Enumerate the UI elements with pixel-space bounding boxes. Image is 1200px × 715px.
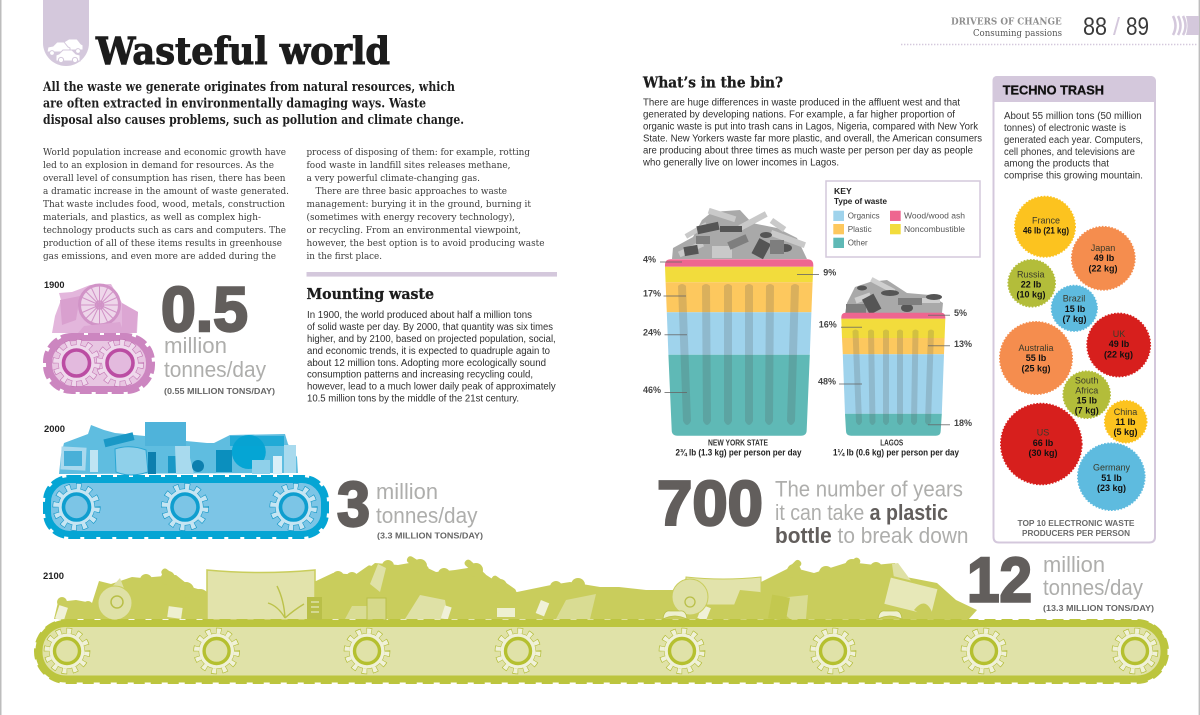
bubble: Russia: (10 kg) — [1016, 290, 1046, 300]
body text column 1: That waste includes food, wood, metals, construction — [43, 199, 285, 210]
body text column 2: food waste in landfill sites releases methane, — [306, 160, 510, 171]
bubble: France: 46 lb (21 kg) — [1023, 226, 1069, 236]
label: 1900: 1900 — [44, 280, 64, 290]
bubble: Japan: (22 kg) — [1088, 263, 1118, 273]
disc second — [672, 579, 708, 615]
body text column 1: overall level of consumption has risen, there has been — [43, 173, 286, 184]
label: 2000: 2000 — [44, 424, 65, 434]
paragraph: Mounting waste: consumption patterns and increasing recycling could, — [307, 370, 533, 381]
panel text: comprise this growing mountain. — [1004, 170, 1143, 182]
intro text: All the waste we generate originates from natural resources, which — [42, 80, 455, 95]
bubble: Japan: 49 lb — [1094, 253, 1115, 263]
chart labels: Lagos bin — [818, 308, 972, 458]
panel caption: PRODUCERS PER PERSON — [1022, 528, 1130, 538]
stat: 700 years: 700 — [657, 469, 763, 539]
stat: 3 million tonnes/day: 3 — [337, 470, 370, 540]
stat: 12 million tonnes/day — [967, 546, 1154, 616]
stat: 0.5 million tonnes/day — [161, 275, 275, 396]
bubble: US: 66 lb — [1033, 438, 1054, 448]
chart labels: Lagos bin: 13% — [954, 339, 972, 349]
page header: 88 — [1083, 13, 1107, 41]
chart labels: Lagos bin: LAGOS — [880, 439, 904, 448]
bubble: UK: UK — [1113, 329, 1125, 339]
paragraph: What's in the bin: organic waste is put into trash cans in Lagos, Nigeria, compared with New York — [643, 122, 978, 133]
icon: tab chevrons — [1173, 16, 1199, 35]
bubble: Brazil — [1052, 286, 1097, 331]
heading: Mounting waste: Mounting waste — [306, 286, 434, 303]
paragraph: What's in the bin: generated by developing nations. For example, a far higher proportion of — [643, 110, 955, 121]
key — [826, 181, 980, 257]
panel text — [1004, 111, 1143, 182]
paragraph: Mounting waste — [307, 310, 556, 404]
chart labels: Lagos bin: 1¼ lb (0.6 kg) per person per day — [833, 448, 959, 458]
body text column 1: World population increase and economic growth have — [43, 147, 286, 158]
page header: Consuming passions — [973, 28, 1062, 39]
chart: New York bin — [665, 259, 813, 436]
bubble: UK: 49 lb — [1109, 339, 1130, 349]
stat: 3 million tonnes/day: tonnes/day — [376, 503, 478, 528]
stat: 700 years: it can take a plastic — [775, 500, 948, 525]
label: 2100: 2100 — [43, 571, 64, 581]
stat: 700 years: bottle to break down — [775, 523, 968, 548]
chart labels: New York bin: 4% — [643, 254, 656, 264]
title: Wasteful world — [95, 29, 390, 73]
bubble: US: US — [1037, 428, 1049, 438]
paragraph: What's in the bin: are producing about three times as much waste per person per day as people — [643, 146, 973, 157]
bubble: Brazil: (7 kg) — [1062, 314, 1087, 324]
body text column 2: (sometimes with energy recovery technology), — [306, 212, 515, 223]
key: Organics — [848, 211, 880, 221]
bubble: UK: (22 kg) — [1104, 349, 1133, 359]
illustration: Lagos rubbish pile — [845, 277, 943, 315]
bubble: China: 11 lb — [1115, 417, 1136, 427]
paragraph: Mounting waste: and economic trends, it is expected to quadruple again to — [307, 346, 550, 357]
panel caption — [1018, 518, 1135, 538]
tablet — [883, 576, 939, 617]
stat: 12 million tonnes/day: 12 — [967, 546, 1032, 616]
chart labels: Lagos bin: 16% — [819, 320, 837, 330]
stat: 0.5 million tonnes/day: tonnes/day — [164, 357, 266, 382]
illustration: New York rubbish pile — [672, 208, 807, 259]
bubble: Japan — [1072, 227, 1135, 290]
paragraph: What's in the bin: who generally live on lower incomes in Lagos. — [642, 158, 839, 169]
key: Type of waste — [834, 196, 887, 206]
key: Wood/wood ash — [904, 211, 965, 221]
bubble: Germany: (23 kg) — [1097, 483, 1126, 493]
bubble: US — [1001, 404, 1082, 484]
old TV with grass — [207, 570, 315, 620]
chart labels: New York bin — [643, 254, 836, 458]
bubble: Australia: 55 lb — [1026, 353, 1047, 363]
body text column 2: process of disposing of them: for example, rotting — [306, 147, 530, 158]
body text column 1: gas emissions, and even more are added during the — [43, 251, 276, 262]
chart labels: New York bin: 9% — [823, 268, 836, 278]
conveyor belt: 1900 — [45, 335, 153, 392]
stat: 12 million tonnes/day: tonnes/day — [1043, 575, 1143, 600]
bubble: Russia — [1008, 260, 1055, 307]
body text column 1: a dramatic increase in the amount of waste generated. — [43, 186, 289, 197]
stat: 12 million tonnes/day: (13.3 MILLION TONS/DAY) — [1043, 603, 1154, 613]
paragraph: Mounting waste: 10.5 million tons by the middle of the 21st century. — [307, 394, 519, 404]
intro text: are often extracted in environmentally damaging ways. Waste — [43, 96, 426, 112]
key: Plastic — [848, 224, 872, 234]
chart labels: New York bin: 24% — [643, 328, 661, 338]
bubble: Germany: 51 lb — [1101, 473, 1122, 483]
stat: 12 million tonnes/day: million — [1043, 552, 1105, 577]
bubble: France: France — [1032, 215, 1060, 225]
illustration: 1900 waste pile — [52, 284, 138, 333]
paragraph: Mounting waste: In 1900, the world produced about half a million tons — [307, 310, 532, 321]
conveyor belt: 2100 — [36, 620, 1168, 682]
body text column 2: a very powerful climate-changing gas. — [306, 173, 480, 184]
panel text: among the products that — [1004, 158, 1109, 170]
bubble: South Africa — [1063, 371, 1110, 418]
chart: Lagos bin — [841, 313, 945, 436]
bubble: Brazil: Brazil — [1063, 294, 1085, 304]
bubble: China — [1105, 401, 1147, 443]
computer tower — [307, 597, 322, 620]
chapter tab with cars icon — [43, 0, 89, 66]
heading: What's in the bin: What’s in the bin? — [642, 74, 783, 92]
chart labels: New York bin: NEW YORK STATE — [708, 439, 768, 448]
body text column 2 — [306, 147, 545, 262]
body text column 1: materials, and plastics, as well as complex high- — [43, 212, 261, 223]
panel text: tonnes) of electronic waste is — [1004, 123, 1126, 134]
bubble: France — [1015, 196, 1075, 257]
chart labels: New York bin: 17% — [643, 288, 661, 298]
bubble: Germany — [1078, 443, 1145, 510]
chart labels: Lagos bin: 18% — [954, 418, 972, 428]
disc — [98, 586, 132, 620]
bubble: South Africa: Africa — [1075, 385, 1098, 395]
illustration: 2100 waste pile — [54, 555, 977, 621]
page header: / — [1113, 13, 1120, 41]
intro text — [42, 80, 464, 128]
body text column 1 — [43, 147, 289, 262]
bubble: Russia: 22 lb — [1021, 280, 1042, 290]
stat: 0.5 million tonnes/day: (0.55 MILLION TONS/DAY) — [164, 386, 275, 396]
paragraph: Mounting waste: higher, and by 2100, based on projected population, social, — [307, 334, 556, 345]
bubble: China: China — [1114, 407, 1137, 417]
body text column 1: led to an explosion in demand for resources. As the — [43, 160, 274, 171]
paragraph: What's in the bin: There are huge differences in waste produced in the affluent west and that — [643, 98, 960, 108]
chart labels: New York bin: 2¾ lb (1.3 kg) per person per day — [676, 448, 802, 458]
icon: cars — [47, 39, 83, 63]
stat: 3 million tonnes/day: million — [376, 479, 438, 504]
stat: 3 million tonnes/day — [337, 470, 483, 541]
bubble: Australia — [1000, 322, 1072, 394]
bubble: Germany: Germany — [1093, 463, 1131, 473]
body text column 1: production of all of these items results in greenhouse — [43, 238, 282, 249]
body text column 2: or recycling. From an environmental viewpoint, — [306, 225, 521, 236]
conveyor belt: 2000 — [45, 477, 327, 537]
stat: 3 million tonnes/day: (3.3 MILLION TONS/DAY) — [377, 531, 483, 541]
stat: 0.5 million tonnes/day: million — [164, 333, 227, 358]
key: Other — [848, 237, 868, 247]
paragraph: Mounting waste: of solid waste per day. By 2000, that quantity was six times — [307, 322, 553, 333]
chart labels: New York bin: 46% — [643, 385, 661, 395]
bubble: Brazil: 15 lb — [1065, 304, 1086, 314]
stat: 700 years — [657, 469, 968, 548]
panel text: generated each year. Computers, — [1004, 135, 1143, 146]
panel heading: TECHNO TRASH — [1003, 82, 1104, 97]
paragraph: What's in the bin: State. New Yorkers waste far more plastic, and overall, the American consumers — [643, 134, 982, 145]
body text column 2: in the first place. — [306, 251, 382, 262]
body text column 2: There are three basic approaches to waste — [316, 186, 507, 197]
paragraph: Mounting waste: however, lead to a much lower daily peak of approximately — [307, 382, 556, 393]
body text column 2: management: burying it in the ground, burning it — [306, 199, 531, 210]
bubble: Japan: Japan — [1091, 243, 1115, 253]
bubble: South Africa: 15 lb — [1076, 395, 1097, 405]
bubble: South Africa: South — [1075, 375, 1098, 385]
bubble: South Africa: (7 kg) — [1075, 405, 1099, 415]
paragraph: Mounting waste: about 12 million tons. Adopting more ecologically sound — [307, 358, 546, 369]
intro text: disposal also causes problems, such as pollution and climate change. — [43, 113, 464, 128]
body text column 1: technology products such as cars and computers. The — [43, 225, 286, 236]
panel: Techno Trash — [993, 76, 1156, 542]
paragraph: What's in the bin — [642, 98, 982, 169]
stat: 0.5 million tonnes/day: 0.5 — [161, 275, 248, 345]
bubble: China: (5 kg) — [1113, 427, 1138, 437]
icon: wheel — [80, 285, 120, 325]
bubble: Australia: (25 kg) — [1021, 363, 1051, 373]
chart labels: Lagos bin: 48% — [818, 376, 836, 386]
bubble: UK — [1087, 313, 1150, 377]
illustration: 2000 waste pile — [59, 422, 298, 475]
key: Noncombustible — [904, 224, 965, 234]
stat: 700 years: The number of years — [775, 477, 963, 502]
bubble: Russia: Russia — [1017, 269, 1044, 279]
bubble: US: (30 kg) — [1028, 448, 1058, 458]
old TV second — [686, 577, 761, 605]
page header — [901, 13, 1199, 44]
chart labels: Lagos bin: 5% — [954, 308, 967, 318]
panel text: About 55 million tons (50 million — [1004, 111, 1142, 122]
panel text: cell phones, and televisions are — [1004, 147, 1135, 158]
panel caption: TOP 10 ELECTRONIC WASTE — [1018, 518, 1135, 528]
page header: DRIVERS OF CHANGE — [951, 16, 1062, 28]
game controllers — [663, 611, 902, 619]
body text column 2: however, the best option is to avoid producing waste — [306, 238, 545, 249]
bubble: Australia: Australia — [1018, 343, 1054, 353]
page header: 89 — [1126, 13, 1149, 41]
key: KEY — [834, 186, 852, 196]
